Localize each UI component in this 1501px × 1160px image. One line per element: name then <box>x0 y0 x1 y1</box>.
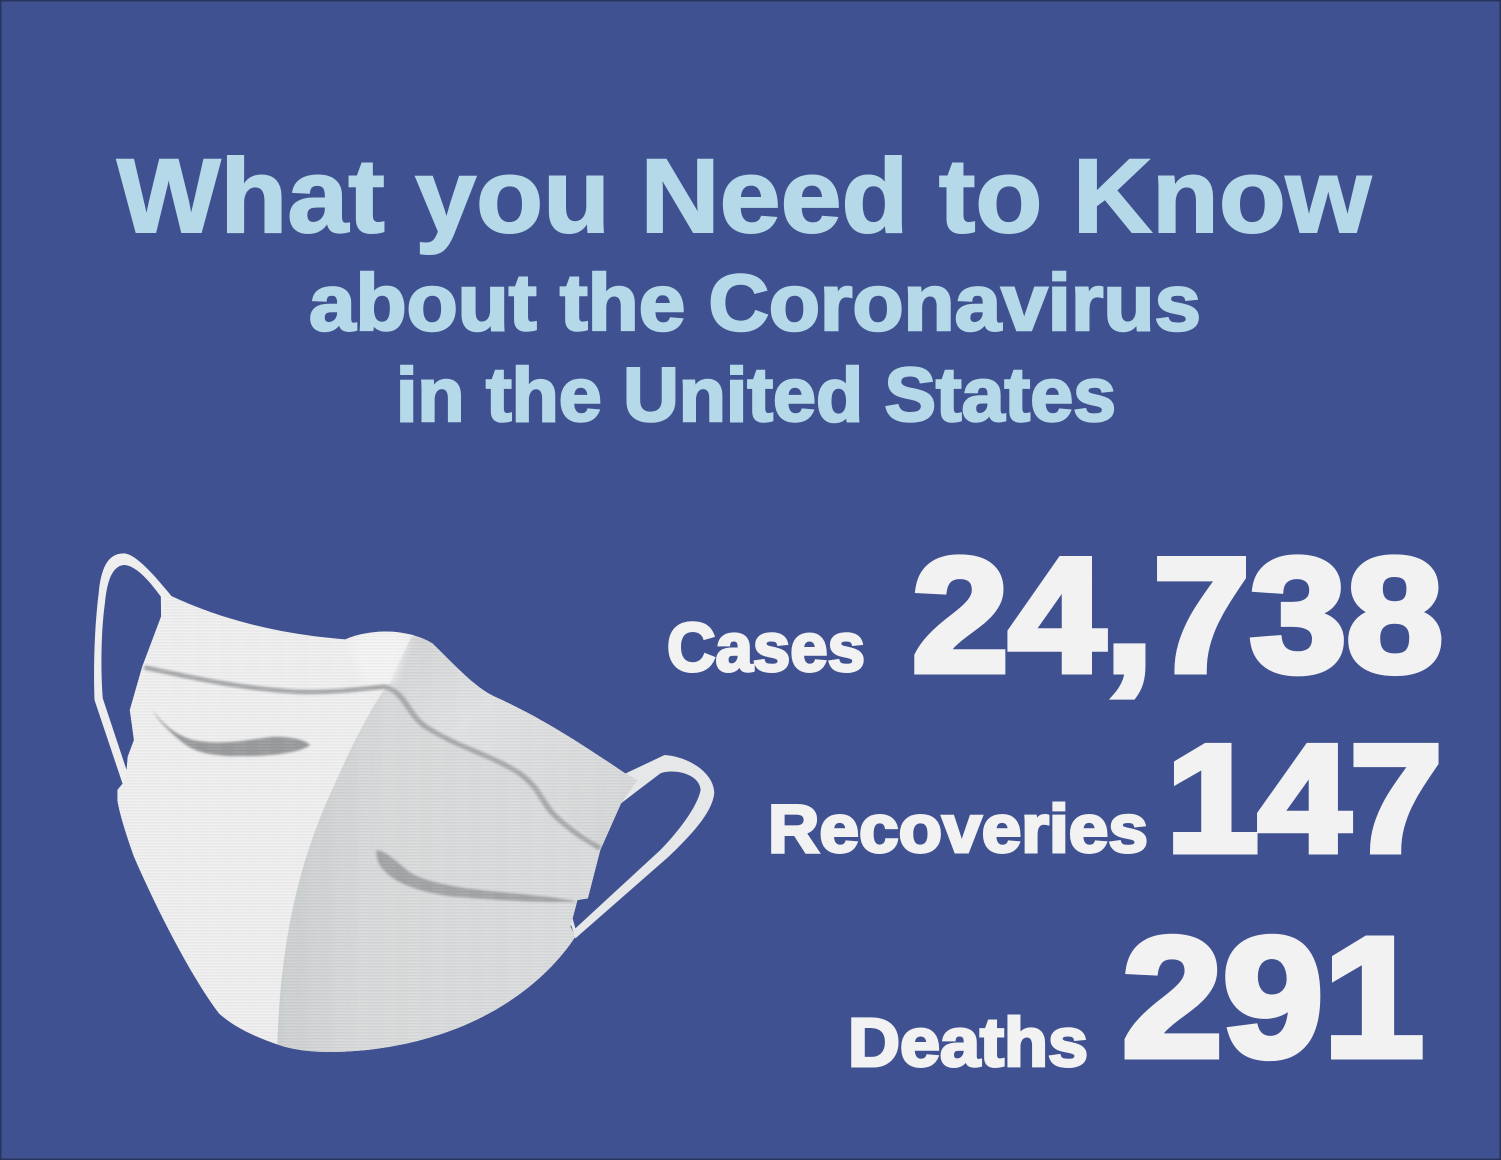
upper right facet <box>389 637 644 850</box>
left crease shadow <box>153 710 310 756</box>
right crease shadow <box>376 850 577 902</box>
title <box>117 138 1371 438</box>
number: 24,738: 24,738 <box>912 525 1443 706</box>
upper pleat <box>144 667 600 848</box>
fabric texture <box>118 597 591 1042</box>
label: Deaths: Deaths <box>848 1004 1088 1081</box>
stat: deaths <box>848 903 1424 1093</box>
heading: What you Need to Know: What you Need to Know <box>117 138 1371 255</box>
number: 291: 291 <box>1122 903 1424 1093</box>
stat: recoveries <box>768 714 1442 884</box>
fold highlight <box>346 632 410 684</box>
left ear loop <box>94 553 173 787</box>
label: Cases: Cases <box>667 609 865 686</box>
subheading: about the Coronavirus: about the Coronavirus <box>309 258 1201 347</box>
icon: face mask <box>94 553 714 1060</box>
right ear loop <box>565 755 714 938</box>
subheading: in the United States: in the United States <box>396 353 1116 438</box>
mask body <box>105 590 660 1060</box>
stat: cases <box>667 525 1443 706</box>
label: Recoveries: Recoveries <box>768 791 1148 867</box>
number: 147: 147 <box>1166 714 1442 884</box>
shaded right panel <box>277 684 626 1052</box>
